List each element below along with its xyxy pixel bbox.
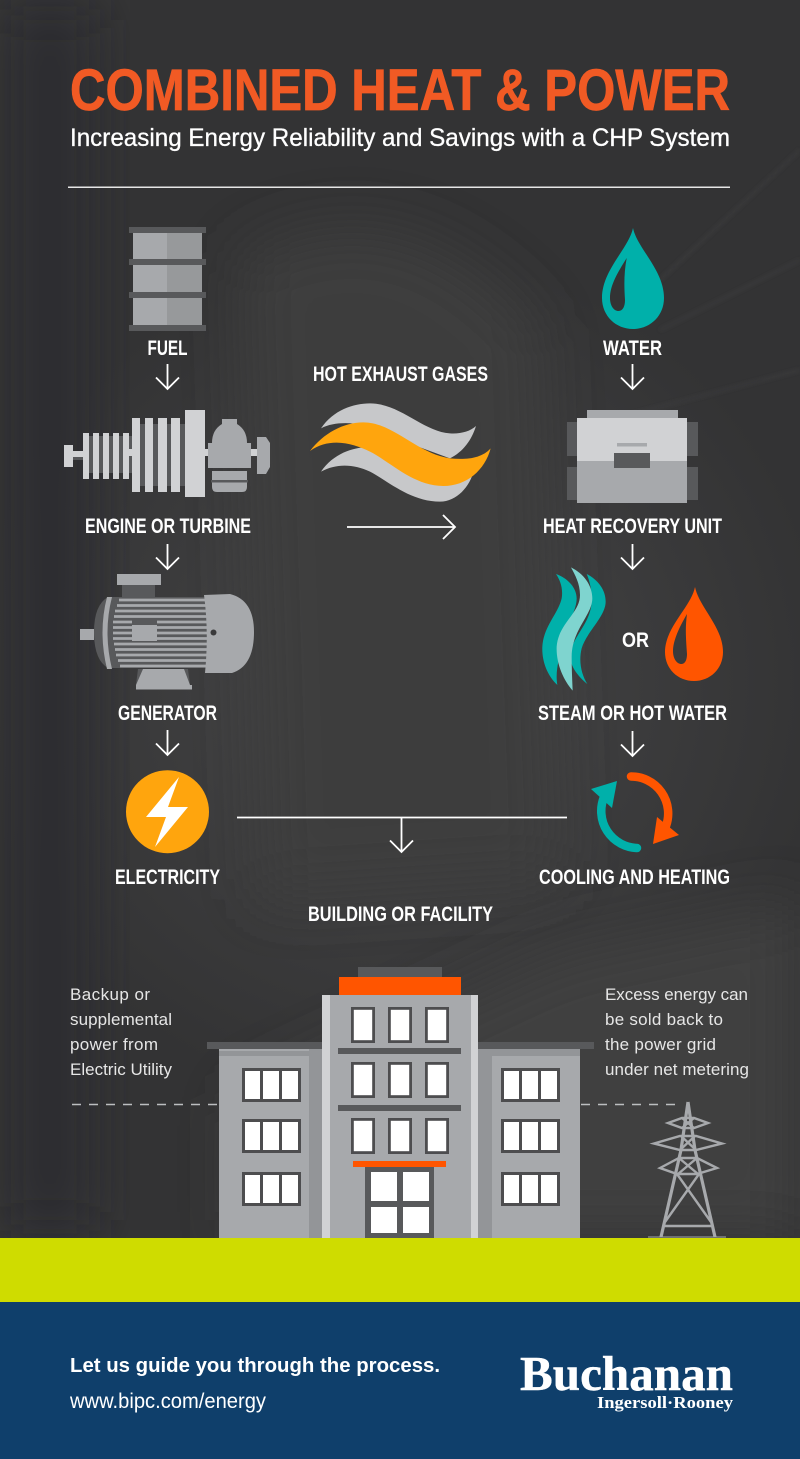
text: backup power: Backup or — [70, 985, 150, 1004]
dashed line: building to grid — [581, 1104, 680, 1106]
label: water: WATER — [603, 337, 662, 360]
footer panel — [0, 1302, 800, 1459]
label: electricity: ELECTRICITY — [115, 866, 220, 889]
icon: water drop — [602, 228, 664, 329]
label: steam or hot water: STEAM OR HOT WATER — [538, 702, 727, 725]
icon: transmission tower — [648, 1102, 726, 1237]
icon: cooling and heating cycle — [591, 776, 679, 848]
icon: heat recovery unit — [567, 410, 698, 503]
ground band — [0, 1238, 800, 1302]
dashed line: utility to building — [72, 1104, 219, 1106]
icon: electricity — [126, 770, 209, 853]
label: fuel: FUEL — [148, 337, 188, 360]
label: engine or turbine: ENGINE OR TURBINE — [85, 515, 251, 538]
connector: outputs to building — [237, 818, 567, 852]
icon: hot water drop — [665, 587, 723, 681]
arrow: heat recovery to steam — [621, 544, 644, 569]
label: cooling and heating: COOLING AND HEATING — [539, 866, 730, 889]
text: excess energy: be sold back to — [605, 1010, 723, 1029]
label: hot exhaust gases: HOT EXHAUST GASES — [313, 363, 488, 386]
icon: building — [207, 967, 594, 1238]
arrow: generator to electricity — [156, 730, 179, 755]
text: backup power: power from — [70, 1035, 158, 1054]
icon: steam — [542, 567, 606, 691]
footer text: url: www.bipc.com/energy — [69, 1390, 266, 1413]
label: or: OR — [622, 629, 649, 652]
text: excess energy — [605, 985, 749, 1079]
arrow: exhaust to heat recovery — [347, 515, 455, 539]
logo: Ingersoll·Rooney — [597, 1393, 734, 1412]
text: excess energy: under net metering — [605, 1060, 749, 1079]
text: excess energy: the power grid — [605, 1035, 716, 1054]
icon: engine or turbine — [64, 410, 270, 497]
label: generator: GENERATOR — [118, 702, 217, 725]
logo: Buchanan — [520, 1346, 733, 1401]
subtitle: Increasing Energy Reliability and Savings with a CHP System — [70, 124, 730, 152]
icon: exhaust flames — [310, 403, 491, 502]
text: excess energy: Excess energy can — [605, 985, 748, 1004]
icon: generator — [80, 574, 254, 690]
icon: fuel barrel — [129, 227, 206, 331]
label: heat recovery unit: HEAT RECOVERY UNIT — [543, 515, 722, 538]
label: building or facility: BUILDING OR FACILITY — [308, 903, 493, 926]
text: backup power: supplemental — [70, 1010, 172, 1029]
arrow: water to heat recovery — [621, 364, 644, 389]
arrow: engine to generator — [156, 544, 179, 569]
arrow: fuel to engine — [156, 364, 179, 389]
arrow: steam to cooling — [621, 731, 644, 756]
text: backup power — [70, 985, 172, 1079]
text: backup power: Electric Utility — [70, 1060, 172, 1079]
footer text: call to action: Let us guide you through the process. — [70, 1355, 440, 1377]
